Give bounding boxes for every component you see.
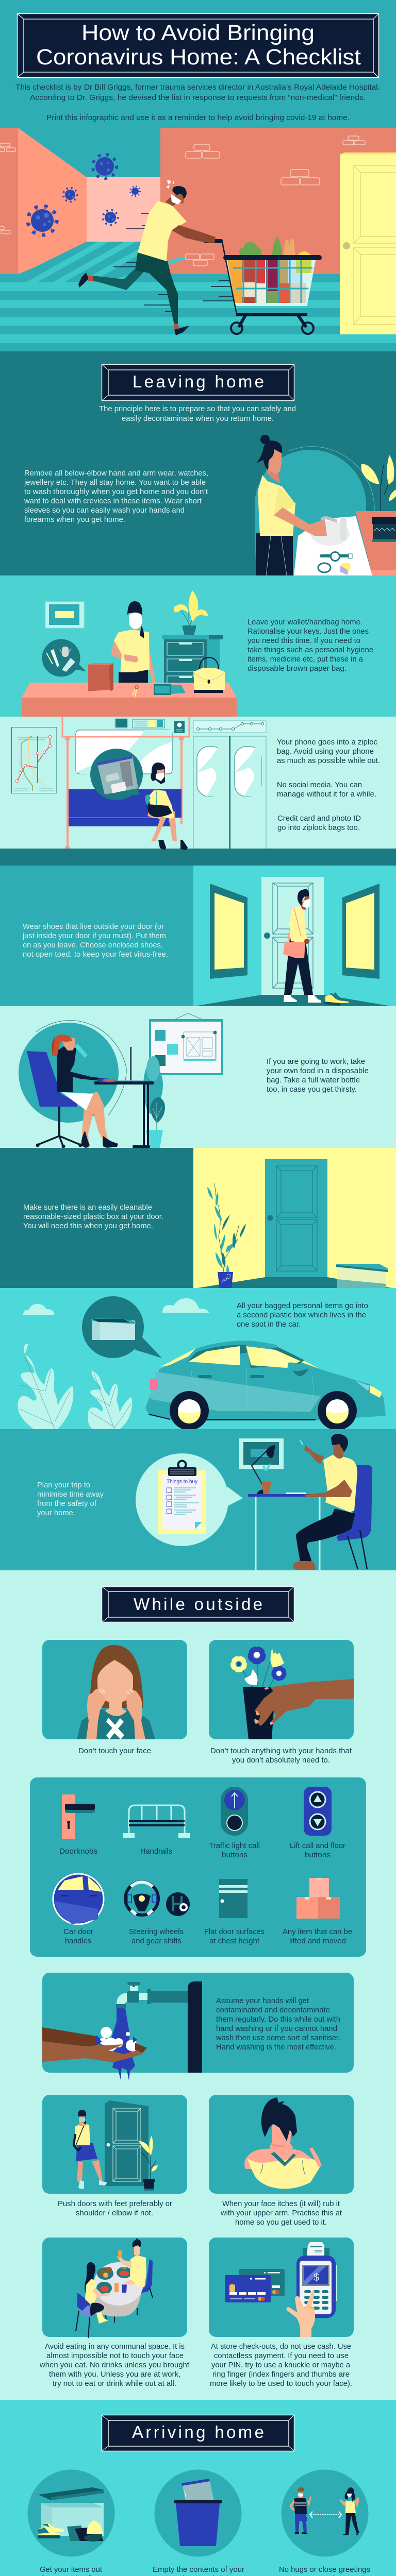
caption: avoid eating: try not to eat or drink while out at all.: [53, 2380, 176, 2388]
labels row 2: Flat door surfaces: [204, 1928, 265, 1936]
text: plastic box: You will need this when you get home.: [23, 1222, 153, 1230]
text: plastic box: [23, 1204, 163, 1230]
caption: face: Don’t touch your face: [78, 1747, 151, 1755]
header panel: [0, 0, 396, 128]
text: remove hand wear: jewellery etc. They all stay home. You want to be able: [24, 479, 206, 487]
woman eating: [85, 2262, 111, 2324]
labels row 1: [59, 1842, 345, 1859]
text: phone: Credit card and photo ID: [277, 815, 361, 823]
water: [111, 2008, 135, 2080]
text: plan: your home.: [37, 1509, 75, 1517]
panel: shoes: [0, 866, 396, 1006]
text: principle: [99, 405, 296, 423]
table top: [22, 683, 237, 698]
text: remove hand wear: forearms when you get home.: [24, 516, 125, 524]
caption: touch: [210, 1747, 352, 1765]
card: don't touch your face: [42, 1640, 187, 1739]
text: phone: bag. Avoid using your phone: [277, 748, 374, 756]
caption: push doors: shoulder / elbow if not.: [76, 2209, 153, 2217]
background circle: [19, 1021, 126, 1123]
text: plan: Plan your trip to: [37, 1481, 90, 1489]
icon: boxes: [296, 1878, 340, 1919]
text: shoes: [22, 923, 168, 959]
caption: check-outs: ring finger (index fingers and thumbs are: [212, 2370, 350, 2379]
text: work food: your own food in a disposable: [267, 1067, 369, 1075]
caption: avoid eating: when you eat. No drinks unless you brought: [39, 2361, 189, 2369]
section: while outside background: [0, 1570, 396, 2400]
text: phone: [277, 738, 380, 832]
metro map: [11, 727, 57, 793]
labels row 1: buttons: [305, 1851, 331, 1859]
man leaving: [283, 889, 321, 1003]
leaves: [18, 1344, 132, 1429]
text: wallet: [248, 618, 373, 673]
caption: face itches: When your face itches (it will) rub it: [222, 2200, 340, 2208]
caption: check-outs: your PIN, try to use a knuckle or maybe a: [211, 2361, 351, 2369]
yellow door: [340, 152, 396, 334]
labels row 2: Car door: [63, 1928, 93, 1936]
potted plant: [139, 2136, 158, 2191]
text: remove hand wear: to wash thoroughly when you get home and you don’t: [24, 488, 208, 496]
speech bubble: box: [82, 1296, 162, 1358]
labels row 2: lifted and moved: [289, 1937, 346, 1945]
caption: avoid eating: them with you. Unless you are at work,: [49, 2370, 180, 2379]
speech bubble: clipboard: Things to buy: [167, 1479, 197, 1485]
text: wallet: disposable brown paper bag.: [248, 665, 346, 673]
text: phone: No social media. You can: [277, 781, 362, 789]
handbag: [193, 657, 225, 693]
text: phone: go into ziplock bags too.: [277, 824, 360, 832]
text: car box: [237, 1302, 368, 1329]
heading: while outside: [102, 1587, 294, 1622]
panel: leave your wallet: [0, 575, 396, 717]
shopping cart: [204, 235, 322, 334]
text: work food: [267, 1058, 369, 1094]
washing hands and foam: [42, 2027, 147, 2062]
text: phone: Your phone goes into a ziploc: [277, 738, 377, 747]
caption: avoid eating: Avoid eating in any communal space. It is: [45, 2343, 185, 2351]
illustration: woman washing hands: [255, 435, 396, 575]
icon: car door handle: [53, 1874, 104, 1924]
text: sanitise: them regularly. Do this while out with: [216, 2015, 340, 2024]
text: remove hand wear: want to deal with crevices in these items. Wear short: [24, 497, 202, 505]
speech bubble: clipboard: [136, 1453, 243, 1546]
shoes at door: [324, 992, 349, 1006]
woman at desk: [27, 1035, 118, 1149]
heading: arriving home: [102, 2415, 294, 2451]
text: wallet: Leave your wallet/handbag home.: [248, 618, 362, 626]
train frame: [62, 717, 189, 849]
icon: steering wheel and gear shift: [125, 1882, 190, 1916]
frame, lamp and desk: [239, 1438, 327, 1570]
arrow: keep distance: [310, 2512, 341, 2518]
text: plastic box: Make sure there is an easily cleanable: [23, 1204, 152, 1212]
caption: avoid eating: [39, 2343, 189, 2388]
car: [145, 1341, 386, 1432]
section: arriving home background: [0, 2400, 396, 2576]
intro text: According to Dr. Griggs, he devised the list in response to requests from “non-medical” friends.: [30, 94, 366, 102]
labels row 2: handles: [65, 1937, 91, 1945]
tall plant: [207, 1183, 246, 1289]
title: Coronavirus Home: A Checklist: [36, 45, 361, 70]
teal door: [194, 1159, 395, 1289]
panel: car box: [0, 1288, 396, 1432]
heading: arriving home: Arriving home: [132, 2422, 264, 2442]
heading: while outside: While outside: [134, 1595, 262, 1614]
picture frame: [45, 602, 84, 628]
card: push doors: [42, 2095, 187, 2194]
caption: face itches: [220, 2200, 342, 2227]
labels row 1: Traffic light call: [209, 1842, 260, 1850]
plant on dresser: [174, 590, 208, 635]
table: [93, 2262, 143, 2316]
panel: desk at work: [0, 1006, 396, 1149]
text: sanitise: hand washing or if you cannot hand: [216, 2025, 337, 2033]
caption: check-outs: contactless payment. If you need to use: [214, 2352, 349, 2360]
heading: leaving home: [102, 365, 294, 401]
text: wallet: take things such as personal hygiene: [248, 646, 373, 654]
circle: throw bags away: [155, 2470, 241, 2556]
labels row 2: and gear shifts: [131, 1937, 182, 1945]
man with phone: [293, 1434, 372, 1570]
text: shoes: just inside your door if you must). Put them: [22, 932, 166, 940]
man eating: [117, 2238, 146, 2287]
table front: [22, 698, 237, 717]
caption: car box: Get your items out: [40, 2566, 102, 2574]
caption: avoid eating: almost impossible not to touch your face: [46, 2352, 184, 2360]
text: shoes: on as you leave. Choose enclosed shoes,: [23, 941, 163, 950]
text: sanitise: Assume your hands will get: [216, 1997, 309, 2005]
plastic box: [336, 1264, 388, 1289]
intro text: Print this infographic and use it as a reminder to help avoid bringing covid-19 at home.: [46, 114, 350, 122]
panel: plan your trip: [0, 1429, 396, 1570]
caption: check-outs: more likely to be used to touch your face).: [210, 2380, 352, 2388]
caption: empty contents: Empty the contents of your: [153, 2566, 244, 2574]
chairs: [76, 2259, 153, 2338]
labels row 1: buttons: [222, 1851, 248, 1859]
text: sanitise: contaminated and decontaminate: [216, 2006, 330, 2014]
text: work food: bag. Take a full water bottle: [267, 1076, 360, 1084]
intro text: This checklist is by Dr Bill Griggs, former trauma services director in Australia’s Royal Adelaide Hospital.: [15, 83, 380, 92]
text: plan: from the safety of: [37, 1500, 97, 1508]
keys: [133, 686, 138, 697]
circle: car box items: [28, 2470, 114, 2556]
text: wallet: Rationalise your keys. Just the ones: [248, 628, 369, 636]
intro text: [15, 83, 380, 122]
labels row 2: Any item that can be: [283, 1928, 352, 1936]
train doors: [193, 721, 266, 849]
icon: traffic light buttons: [221, 1787, 248, 1836]
text: principle: The principle here is to prepare so that you can safely and: [99, 405, 296, 413]
credit cards: [225, 2269, 285, 2302]
woman pushing door: [74, 2110, 107, 2189]
labels row 2: Steering wheels: [129, 1928, 184, 1936]
text: sanitise: [216, 1997, 340, 2052]
panel: surfaces to avoid: [30, 1777, 366, 1957]
icon: handrail: [123, 1805, 190, 1838]
text: principle: easily decontaminate when you return home.: [122, 415, 274, 423]
panel: on the train: [0, 717, 396, 866]
title: How to Avoid Bringing: [81, 21, 315, 45]
caption: check-outs: At store check-outs, do not use cash. Use: [211, 2343, 351, 2351]
labels row 1: Doorknobs: [59, 1848, 97, 1856]
labels row 2: [63, 1928, 352, 1945]
labels row 1: Lift call and floor: [290, 1842, 345, 1850]
seated woman: [145, 762, 188, 850]
text: sanitise: wash then use some sort of sanitiser.: [216, 2034, 340, 2042]
whiteboard: [149, 1013, 223, 1075]
door: [105, 2100, 148, 2186]
windows: [210, 884, 380, 979]
speed lines: [113, 213, 270, 312]
caption: push doors: [58, 2200, 172, 2217]
desk and plant: [94, 1047, 165, 1148]
text: wallet: you need this time. If you need to: [248, 637, 360, 645]
labels row 2: at chest height: [209, 1937, 259, 1945]
payment terminal: [296, 2242, 337, 2318]
payment terminal: $: [314, 2272, 319, 2283]
watch and bracelets: [318, 551, 352, 575]
speech bubble: ziploc bag: [90, 749, 143, 800]
caption: push doors: Push doors with feet preferably or: [58, 2200, 172, 2208]
text: shoes: Wear shoes that live outside your door (or: [23, 923, 164, 931]
caption: face itches: home so you get used to it.: [235, 2218, 327, 2227]
clouds: [23, 1298, 209, 1315]
paper bag: [88, 663, 113, 691]
wall and tap: [116, 1981, 202, 2073]
text: plastic box: reasonable-sized plastic box at your door.: [23, 1213, 163, 1221]
text: plan: [37, 1481, 104, 1517]
woman at table: [111, 601, 156, 683]
man: [289, 2487, 311, 2534]
door: [194, 877, 391, 1006]
speech bubble: toiletries: [42, 639, 86, 677]
text: car box: one spot in the car.: [237, 1320, 301, 1329]
text: remove hand wear: Remove all below-elbow hand and arm wear, watches,: [24, 469, 208, 478]
icon: doorknob: [62, 1794, 95, 1839]
card: contactless payment: [209, 2238, 354, 2337]
title: [18, 13, 378, 77]
text: car box: a second plastic box which lives in the: [237, 1311, 366, 1319]
text: car box: All your bagged personal items go into: [237, 1302, 368, 1310]
text: plan: minimise time away: [37, 1490, 104, 1499]
wallet and cash: [154, 684, 186, 695]
panel: plastic box at door: [0, 1148, 396, 1289]
text: phone: manage without it for a while.: [277, 790, 376, 799]
caption: no hugs: No hugs or close greetings: [279, 2566, 370, 2574]
text: work food: If you are going to work, take: [267, 1058, 365, 1066]
icon: flat door: [219, 1879, 248, 1918]
icon: lift buttons: [304, 1787, 332, 1836]
heading: leaving home: Leaving home: [133, 372, 264, 391]
card: hand washing: [42, 1973, 354, 2080]
text: sanitise: Hand washing is the most effective.: [216, 2043, 336, 2052]
text: work food: too, in case you get thirsty.: [267, 1086, 357, 1094]
card: rub with upper arm: [209, 2095, 354, 2194]
labels row 1: Handrails: [140, 1848, 172, 1856]
text: remove hand wear: [24, 469, 208, 524]
hand pressing: [287, 2291, 315, 2337]
card: avoid eating: [42, 2238, 187, 2338]
text: wallet: items, medicine etc, put these in a: [248, 655, 364, 664]
caption: touch: Don’t touch anything with your hands that: [210, 1747, 352, 1755]
circle: no hugs: [282, 2470, 368, 2556]
hero illustration: man running with shopping cart: [0, 128, 396, 351]
running man: [78, 179, 216, 335]
virus particles: [27, 154, 140, 235]
caption: check-outs: [210, 2343, 352, 2388]
card: don't touch anything: [209, 1640, 354, 1739]
text: shoes: not open toed, to keep your feet virus-free.: [23, 951, 168, 959]
caption: face itches: with your upper arm. Practise this at: [220, 2209, 342, 2217]
dresser: [162, 635, 223, 683]
text: phone: as much as possible while out.: [277, 757, 380, 765]
woman figure: [256, 435, 327, 575]
caption: touch: you don’t absolutely need to.: [232, 1756, 330, 1765]
text: remove hand wear: sleeves so you can easily wash your hands and: [24, 506, 185, 515]
woman: [340, 2487, 359, 2535]
